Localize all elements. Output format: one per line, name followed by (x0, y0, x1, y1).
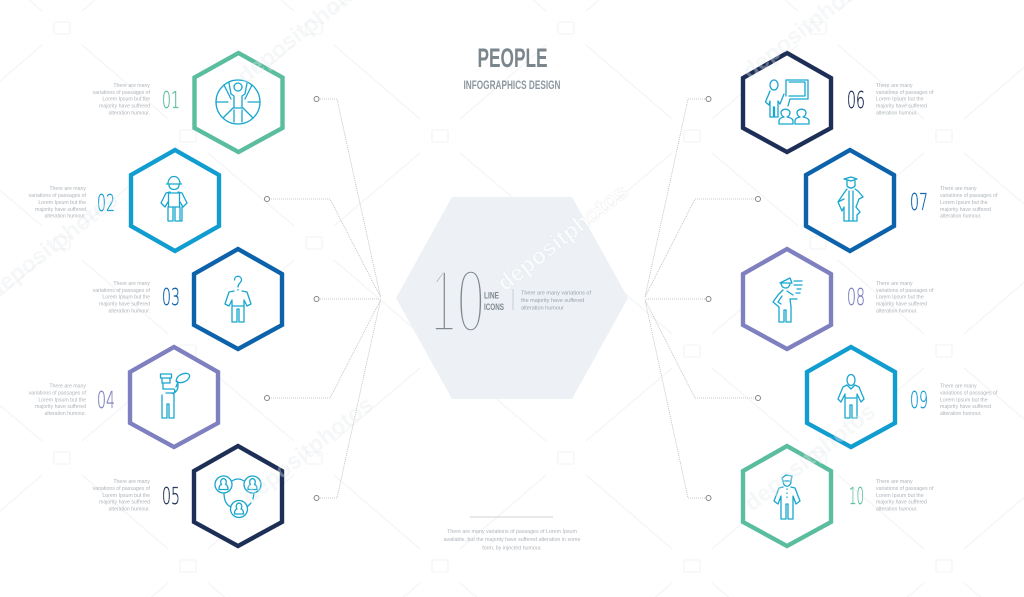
description 04: majority have suffered (35, 404, 86, 410)
description 05: Lorem Ipsum but the (102, 493, 150, 499)
number 07: 07 (910, 188, 928, 216)
line icons label: LINE (484, 290, 499, 300)
description 09: Lorem Ipsum but the (940, 398, 988, 404)
description 09: majority have suffered (940, 404, 991, 410)
description 02: Lorem Ipsum but the (38, 200, 86, 206)
description 08: There are many (876, 281, 913, 287)
panel: center hexagon (396, 197, 628, 399)
icon: basketball player (216, 80, 260, 124)
description 01: majority have suffered (99, 104, 150, 110)
icon: man with buttons (774, 475, 800, 519)
panel: item 10 (743, 446, 934, 546)
panel: item 07 (806, 150, 998, 251)
line icons label: ICONS (484, 302, 504, 312)
description 07: majority have suffered (940, 207, 991, 213)
watermarks: depositphotos (492, 178, 633, 296)
description 07: Lorem Ipsum but the (940, 200, 988, 206)
description 10: alteration humour. (876, 506, 918, 512)
icon: network of people (215, 476, 261, 518)
description 10: There are many (876, 479, 913, 485)
description 06: alteration humour. (876, 110, 918, 116)
icon: person with question mark (225, 276, 251, 322)
panel: item 05 (93, 446, 282, 546)
number 03: 03 (162, 283, 180, 311)
center description: alteration humour (521, 306, 564, 312)
description 06: Lorem Ipsum but the (876, 96, 924, 102)
number 05: 05 (162, 482, 180, 510)
description 02: There are many (49, 186, 86, 192)
description 02: alteration humour. (44, 214, 86, 220)
center description: the majority have suffered (521, 298, 584, 304)
description 10: variations of passages of (876, 486, 934, 492)
number 04: 04 (97, 386, 115, 414)
number 06: 06 (847, 86, 865, 114)
icon: teacher with board (766, 80, 809, 124)
big number 10: 0 (457, 251, 485, 352)
description 03: alteration humour. (108, 308, 150, 314)
description 09: alteration humour. (940, 411, 982, 417)
description 01: variations of passages of (93, 90, 151, 96)
title: PEOPLE (478, 43, 548, 73)
description 09: variations of passages of (940, 390, 998, 396)
big number 10: 1 (431, 252, 456, 352)
footer text: form, by injected humour. (482, 546, 542, 552)
number 01: 01 (162, 86, 180, 114)
panel: item 06 (743, 53, 934, 152)
description 10: Lorem Ipsum but the (876, 493, 924, 499)
description 07: alteration humour. (940, 214, 982, 220)
watermarks (0, 0, 880, 516)
description 04: Lorem Ipsum but the (38, 398, 86, 404)
description 03: Lorem Ipsum but the (102, 294, 150, 300)
panel: item 01 (93, 53, 282, 152)
icon: construction worker (161, 176, 187, 221)
connectors: left (264, 96, 380, 500)
description 04: variations of passages of (29, 390, 87, 396)
description 09: There are many (940, 384, 977, 390)
footer text (444, 517, 580, 552)
description 02: majority have suffered (35, 207, 86, 213)
subtitle: INFOGRAPHICS DESIGN (464, 80, 560, 92)
watermarks: depositphotos (237, 391, 378, 509)
description 05: majority have suffered (99, 500, 150, 506)
panel: item 03 (93, 249, 282, 349)
description 08: alteration humour. (876, 308, 918, 314)
panel: item 02 (29, 150, 219, 251)
connectors: right (645, 96, 760, 500)
number 02: 02 (97, 189, 115, 217)
description 01: alteration humour. (108, 110, 150, 116)
description 01: There are many (113, 83, 150, 89)
description 06: There are many (876, 83, 913, 89)
icon: graduate (838, 177, 863, 221)
footer text: available, but the majority have suffered alteration in some (444, 537, 580, 543)
description 03: There are many (113, 281, 150, 287)
center description: There are many variations of (521, 290, 591, 296)
description 08: Lorem Ipsum but the (876, 294, 924, 300)
panel: item 09 (807, 347, 998, 447)
number 10: 10 (849, 484, 864, 510)
description 04: There are many (49, 384, 86, 390)
description 07: variations of passages of (940, 193, 998, 199)
description 10: majority have suffered (876, 500, 927, 506)
icon: person with box and balloon (160, 371, 191, 418)
number 09: 09 (910, 386, 928, 414)
watermarks: depositphotos (739, 398, 880, 516)
description 03: variations of passages of (93, 288, 151, 294)
footer text: There are many variations of passages of Lorem Ipsum (447, 529, 578, 535)
description 05: variations of passages of (93, 486, 151, 492)
number 08: 08 (847, 283, 865, 311)
line icons label (484, 290, 504, 312)
big number 10 (431, 251, 485, 352)
description 05: alteration humour. (108, 506, 150, 512)
description 04: alteration humour. (44, 411, 86, 417)
icon: person talking (773, 278, 802, 322)
description 01: Lorem Ipsum but the (102, 96, 150, 102)
panel: item 04 (29, 347, 218, 447)
description 06: variations of passages of (876, 90, 934, 96)
panel: item 08 (743, 249, 934, 349)
description 03: majority have suffered (99, 302, 150, 308)
description 06: majority have suffered (876, 104, 927, 110)
description 05: There are many (113, 479, 150, 485)
description 02: variations of passages of (29, 193, 87, 199)
description 08: majority have suffered (876, 302, 927, 308)
description 08: variations of passages of (876, 288, 934, 294)
icon: standing man (838, 374, 864, 418)
description 07: There are many (940, 186, 977, 192)
